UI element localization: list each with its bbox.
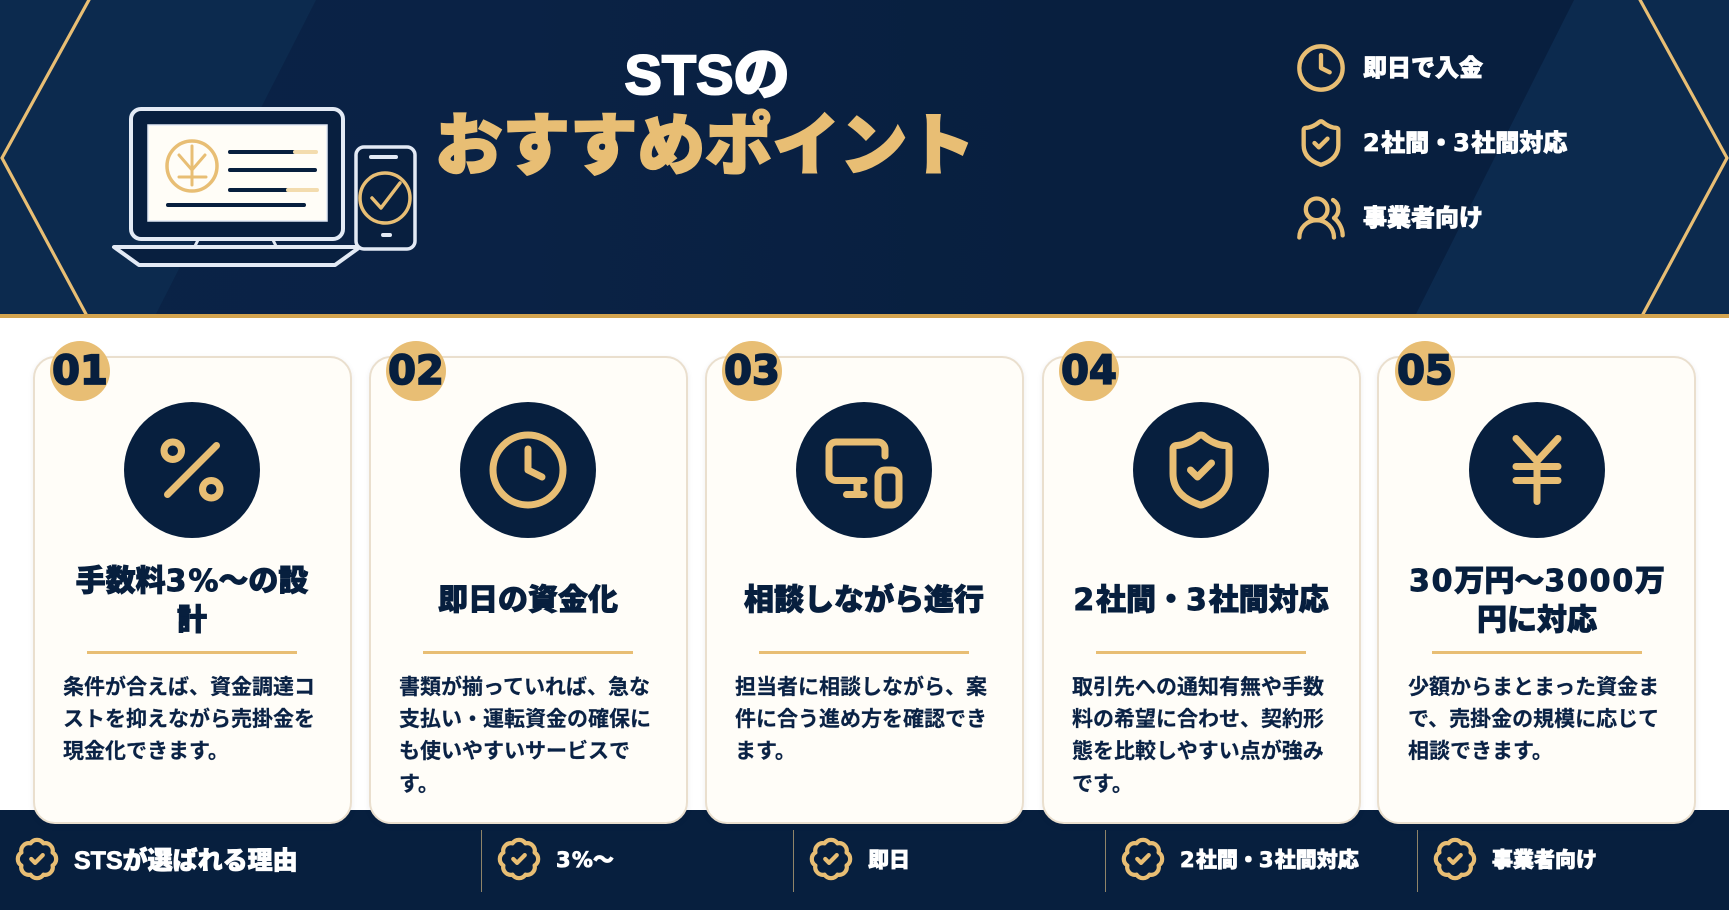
card title: 円に対応	[1477, 604, 1597, 637]
icon: badge check	[1122, 838, 1164, 880]
card text	[1072, 676, 1324, 796]
card text: 態を比較しやすい点が強み	[1072, 740, 1324, 763]
card title	[76, 564, 309, 637]
card title: 2社間・3社間対応	[1073, 583, 1329, 618]
card text: 件に合う進め方を確認でき	[735, 708, 987, 731]
card 05	[1377, 356, 1696, 824]
card 04	[1042, 356, 1361, 824]
icon: percent	[124, 402, 260, 538]
card title: 計	[177, 604, 207, 637]
icon: devices	[796, 402, 932, 538]
header feature: for businesses: 事業者向け	[1363, 205, 1483, 232]
card text: 担当者に相談しながら、案	[735, 676, 987, 698]
header feature: same-day deposit	[1297, 44, 1484, 92]
card text: 取引先への通知有無や手数	[1072, 676, 1324, 698]
icon: clock	[460, 402, 596, 538]
header banner	[0, 0, 1729, 318]
icon: users	[1297, 196, 1345, 240]
card title: 手数料3%〜の設	[76, 564, 308, 599]
footer item: 2 or 3 party	[1122, 838, 1359, 880]
card title: 即日の資金化	[438, 584, 618, 617]
number 04: 04	[1061, 348, 1117, 394]
card text: 相談できます。	[1408, 740, 1553, 763]
footer item: 3%: 3%〜	[556, 848, 614, 872]
number 03: 03	[724, 348, 780, 394]
card text: 現金化できます。	[63, 740, 229, 763]
icon: clock	[1297, 44, 1345, 92]
footer item: for businesses	[1434, 838, 1597, 880]
header feature: same-day deposit: 即日で入金	[1363, 55, 1483, 82]
icon: shield	[1302, 119, 1340, 167]
number 05: 05	[1397, 348, 1453, 394]
header background shapes and gold chevrons	[0, 0, 1729, 314]
title line 2: おすすめポイント	[435, 109, 975, 184]
footer item: heading	[16, 838, 298, 880]
footer item: same day	[810, 838, 910, 880]
header feature: 2 or 3 party: 2社間・3社間対応	[1363, 129, 1567, 157]
footer item: heading: STSが選ばれる理由	[74, 847, 298, 875]
card title: 30万円〜3000万	[1409, 564, 1665, 599]
card 01	[33, 356, 352, 824]
card text: 条件が合えば、資金調達コ	[63, 676, 315, 698]
illustration: laptop and phone	[112, 107, 417, 267]
card title	[1409, 564, 1665, 637]
gold header underline	[0, 314, 1729, 318]
card text: で、売掛金の規模に応じて	[1408, 708, 1659, 731]
number 01: 01	[52, 348, 108, 394]
footer bar	[0, 810, 1729, 910]
header feature: for businesses	[1297, 196, 1483, 240]
card text: 料の希望に合わせ、契約形	[1072, 708, 1324, 731]
card text: ます。	[735, 740, 796, 763]
footer item: 3%	[498, 838, 614, 880]
icon: badge check	[810, 838, 852, 880]
card text: 書類が揃っていれば、急な	[399, 676, 650, 698]
icon: badge check	[16, 838, 58, 880]
footer item: 2 or 3 party: 2社間・3社間対応	[1180, 848, 1359, 872]
card title: 相談しながら進行	[744, 584, 984, 617]
card text: す。	[399, 773, 439, 796]
card text	[735, 676, 987, 763]
card text: も使いやすいサービスで	[399, 740, 630, 763]
number 02: 02	[388, 348, 444, 394]
footer item: for businesses: 事業者向け	[1492, 849, 1597, 872]
icon: yen	[1469, 402, 1605, 538]
card text	[1408, 676, 1659, 763]
title line 1: STSの	[625, 43, 789, 106]
icon: shield	[1133, 402, 1269, 538]
card text	[63, 676, 315, 763]
card text: 少額からまとまった資金ま	[1408, 676, 1659, 698]
card text: ストを抑えながら売掛金を	[63, 708, 315, 731]
header feature: 2 or 3 party	[1302, 119, 1568, 167]
footer item: same day: 即日	[868, 849, 910, 872]
card 03	[705, 356, 1024, 824]
card text: です。	[1072, 773, 1133, 796]
card text	[399, 676, 651, 796]
card 02	[369, 356, 688, 824]
card text: 支払い・運転資金の確保に	[399, 708, 651, 731]
icon: badge check	[1434, 838, 1476, 880]
icon: badge check	[498, 838, 540, 880]
